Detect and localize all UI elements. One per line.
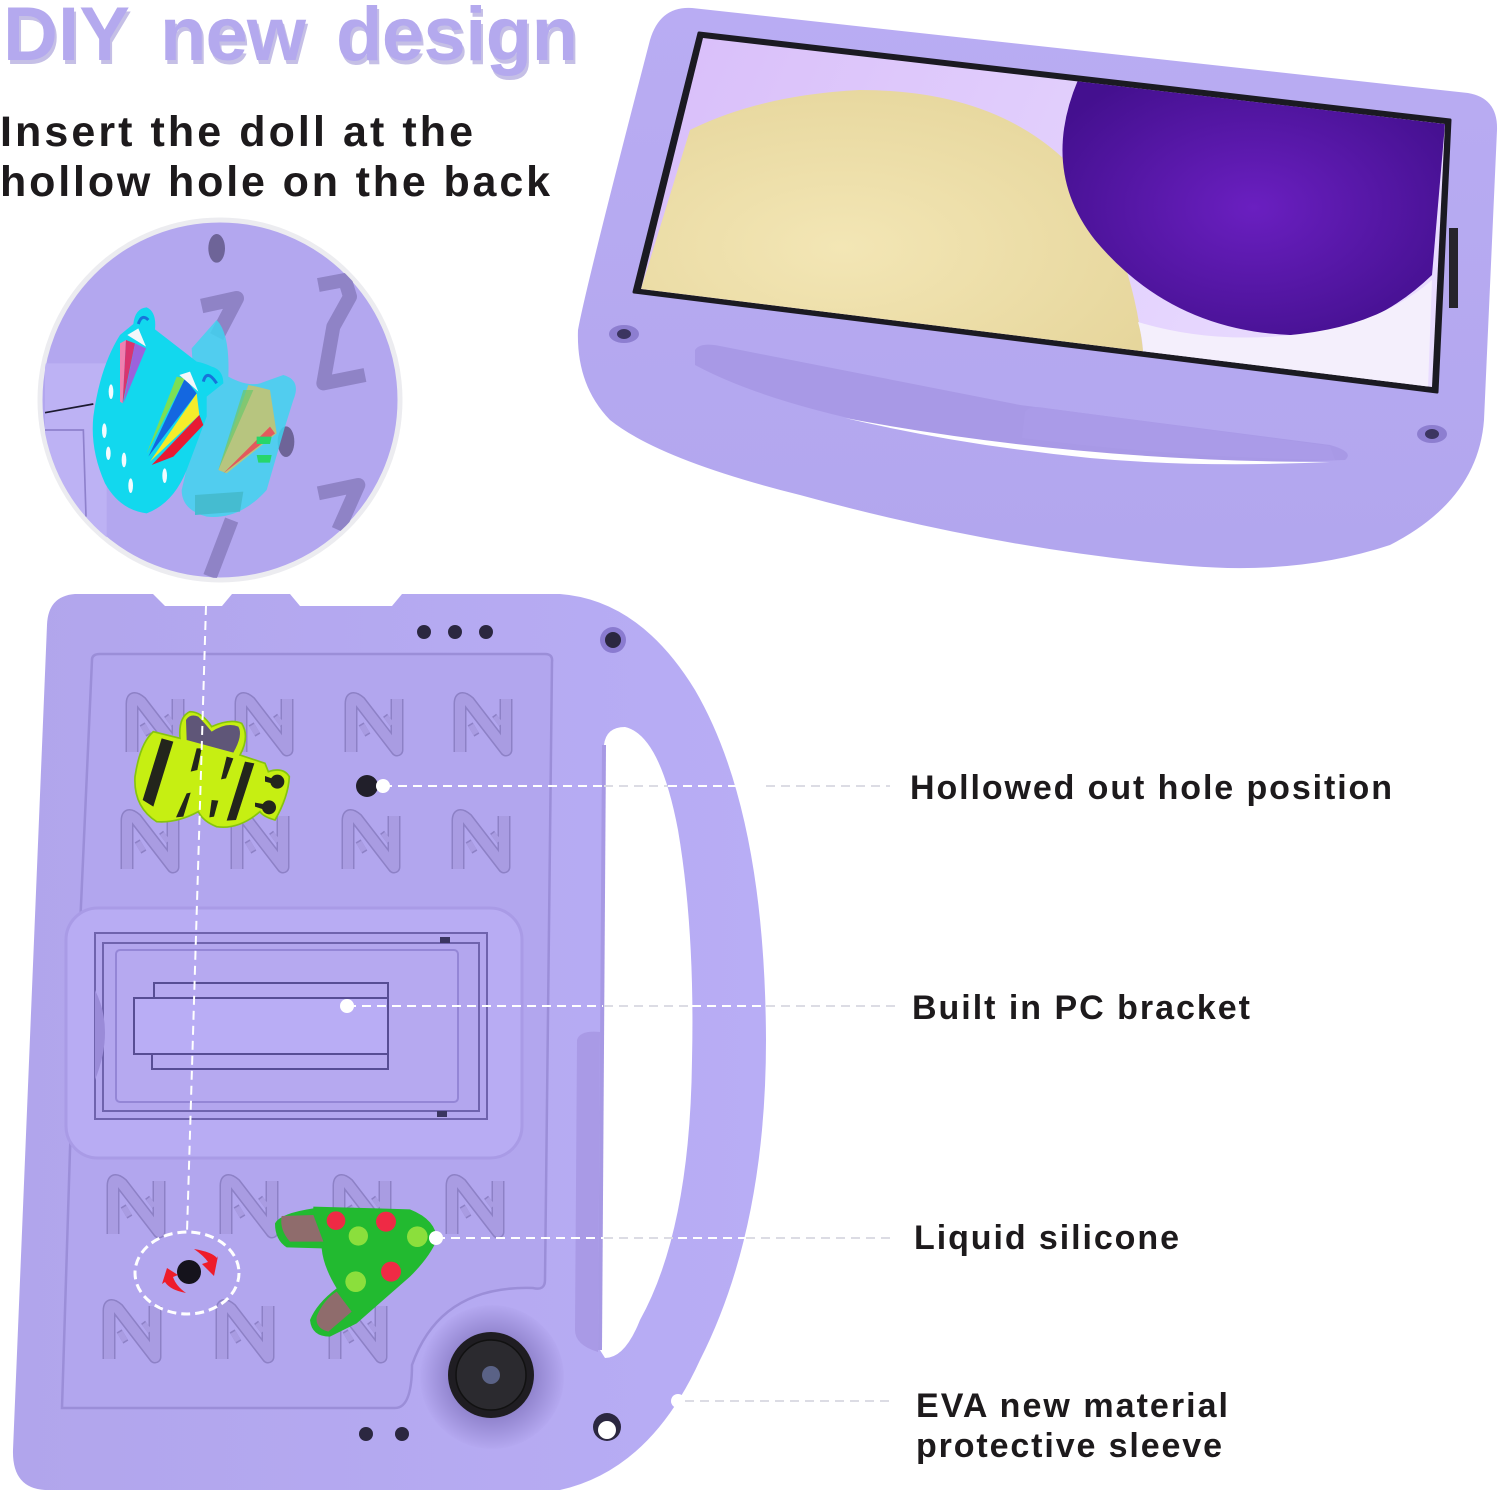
handle opening shading bbox=[695, 345, 1348, 462]
callout: hollowed out hole position: Hollowed out hole position bbox=[910, 769, 1392, 807]
title bbox=[3, 0, 580, 81]
wall recess shapes bbox=[45, 363, 107, 538]
subtitle text block: hollow hole on the back bbox=[0, 158, 550, 206]
subtitle text block: Insert the doll at the bbox=[0, 108, 473, 156]
N-shaped recesses bottom bbox=[109, 1180, 498, 1359]
callout: eva material: protective sleeve bbox=[916, 1427, 1222, 1465]
subtitle text block bbox=[0, 108, 550, 206]
callout: eva material bbox=[671, 1387, 1228, 1465]
callout: hollowed out hole position bbox=[376, 769, 1392, 807]
tablet screen bbox=[620, 30, 1460, 400]
callout: eva material: EVA new material bbox=[916, 1387, 1228, 1425]
recessed back panel bbox=[62, 654, 552, 1408]
doll bbox=[93, 307, 223, 513]
icon: tree doll bbox=[275, 1207, 437, 1337]
ghost doll bbox=[182, 320, 296, 517]
icon: bee doll bbox=[135, 712, 289, 827]
tablet case front view bbox=[578, 8, 1497, 568]
case holes back bbox=[356, 625, 626, 1441]
handle gap bbox=[845, 418, 1330, 464]
bracket bbox=[66, 908, 522, 1158]
callout: liquid silicone bbox=[429, 1219, 1179, 1257]
handle opening bbox=[600, 727, 692, 1358]
detail circle: doll insertion bbox=[40, 220, 400, 580]
camera bbox=[420, 1305, 564, 1449]
callout: liquid silicone: Liquid silicone bbox=[914, 1219, 1179, 1257]
tablet case back view bbox=[13, 594, 766, 1490]
dashed guide bee to hole bbox=[187, 606, 206, 1232]
callout: built in pc bracket bbox=[340, 989, 1250, 1027]
N-shaped recesses top bbox=[127, 698, 506, 869]
case holes bbox=[609, 325, 1447, 443]
rotate hole marker bbox=[135, 1232, 239, 1314]
callout: built in pc bracket: Built in PC bracket bbox=[912, 989, 1250, 1027]
